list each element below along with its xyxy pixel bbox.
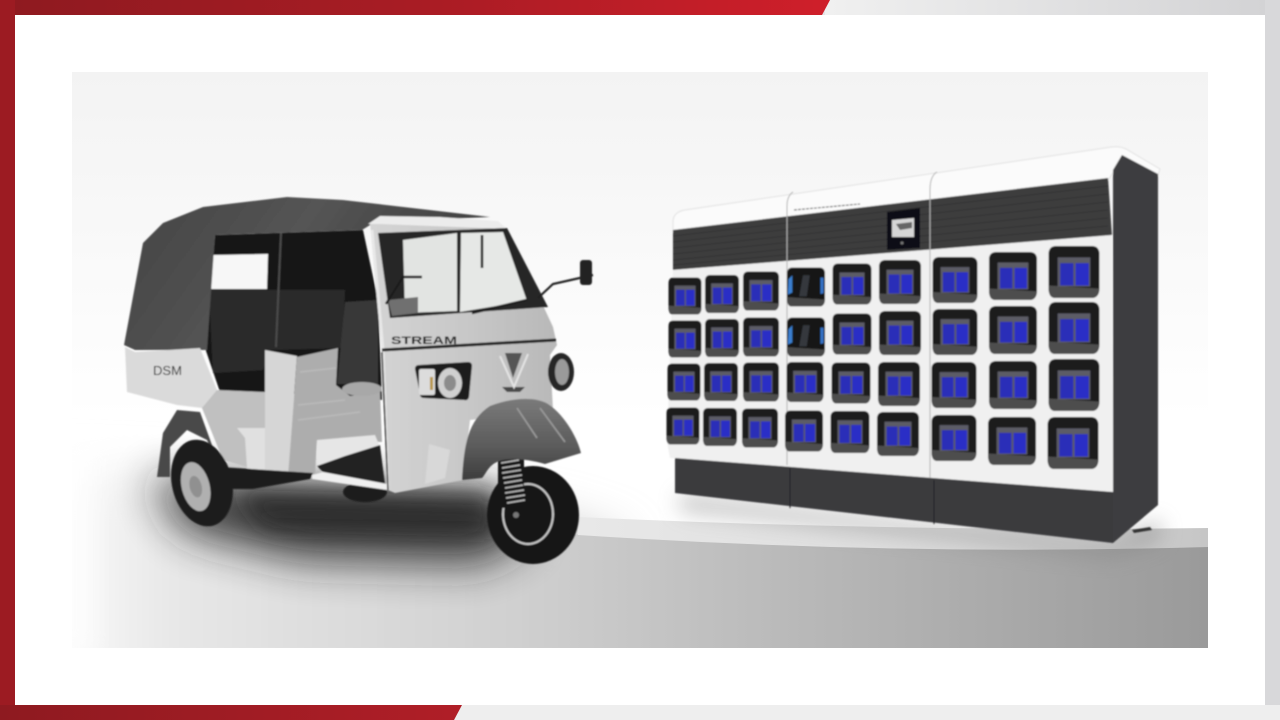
curved plinth band <box>578 517 1208 550</box>
rear window <box>211 254 268 289</box>
vent lines <box>673 186 1108 265</box>
right glass <box>460 232 527 312</box>
chassis <box>220 467 313 489</box>
door well <box>317 445 385 485</box>
floor <box>569 534 1208 648</box>
front fender <box>462 399 581 480</box>
cab stripe <box>382 340 556 350</box>
mirror <box>580 260 592 285</box>
wipers <box>472 235 527 313</box>
fender highlights <box>517 408 565 442</box>
cabinet base <box>675 458 1113 543</box>
left glass <box>403 233 457 313</box>
headlight pod <box>415 362 472 400</box>
side pillar <box>265 350 297 477</box>
electric auto rickshaw <box>124 197 593 564</box>
top red bar <box>0 0 830 15</box>
seat base <box>342 382 382 396</box>
rear cargo box <box>125 347 222 420</box>
rear wheel <box>162 433 242 533</box>
rear step <box>237 428 265 472</box>
cabinet side <box>1113 155 1158 543</box>
cabinet foot <box>1132 527 1152 533</box>
shadow core <box>235 490 495 532</box>
top grey bar <box>825 0 1280 15</box>
V logo <box>500 353 528 392</box>
bottom red bar <box>0 705 462 720</box>
front cab <box>370 223 557 493</box>
left fade <box>50 440 95 655</box>
left red bar <box>0 0 15 720</box>
touch screen <box>887 208 920 250</box>
interior <box>205 230 382 400</box>
photo panel <box>72 72 1208 648</box>
right grey bar <box>1265 0 1280 720</box>
step block <box>317 435 380 467</box>
panel background <box>72 72 1208 186</box>
suspension spring <box>498 458 525 508</box>
door panel ridges <box>298 368 360 420</box>
cabinet floor shadow <box>680 495 1160 556</box>
door pillar <box>372 230 388 490</box>
cabinet caption smudge <box>794 204 860 210</box>
module seams <box>787 172 937 478</box>
battery swapping cabinet <box>666 147 1160 543</box>
cab roof strip <box>368 216 507 229</box>
DSM badge: DSM <box>153 363 182 378</box>
rear body panel <box>202 390 265 472</box>
dash shape <box>388 297 418 316</box>
fabric canopy <box>124 197 490 350</box>
rear fender <box>157 410 220 477</box>
vehicle ground shadow <box>150 480 530 562</box>
windshield frame <box>378 228 548 318</box>
middle rear wheel <box>343 482 387 502</box>
rear seat back <box>209 290 345 373</box>
door sill <box>312 472 387 490</box>
cabinet front panel <box>667 235 1113 492</box>
STREAM badge: STREAM <box>391 335 457 347</box>
door panel <box>288 348 382 477</box>
vent band <box>673 178 1112 270</box>
grab pillar <box>276 233 281 347</box>
side headlight <box>548 353 574 391</box>
mirror arm <box>538 275 593 298</box>
blurred left floor <box>99 470 613 648</box>
steering <box>386 277 422 304</box>
front seat back <box>337 300 378 385</box>
lower cab highlight <box>425 444 450 484</box>
bottom light bar <box>450 705 1280 720</box>
top white cap <box>673 147 1160 232</box>
front wheel <box>487 466 579 564</box>
battery slots <box>666 246 1100 469</box>
